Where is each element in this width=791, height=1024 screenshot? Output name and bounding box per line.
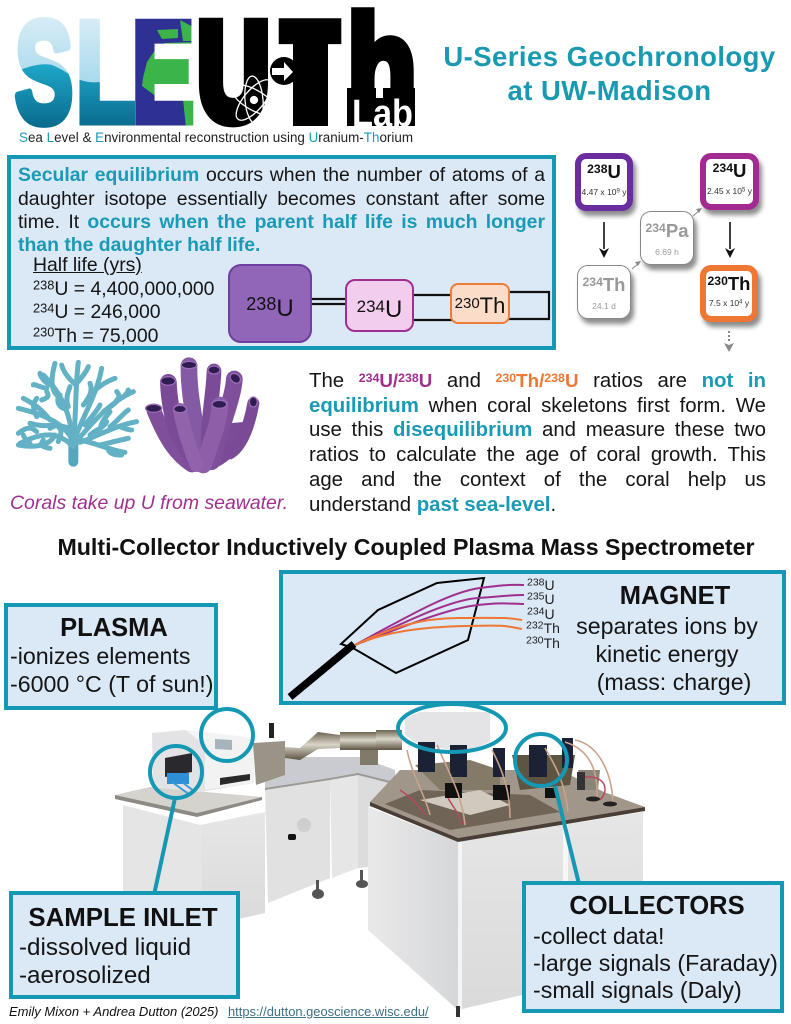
isotope: 230Th: 230Th [708, 273, 750, 294]
text: plasma description: -6000 °C (T of sun!) [10, 670, 213, 696]
logo: SLEUTh Lab [14, 0, 417, 150]
node: 234U: 234U [357, 296, 402, 323]
logo: SLEUTh Lab: Lab [352, 93, 413, 135]
text: secular equilibrium definition: daughter isotope essentially becomes constant after some [18, 188, 545, 210]
magnet housing [405, 712, 490, 752]
label: 230Th: 230Th [526, 635, 560, 651]
isotope: 234Th: 234Th [582, 274, 625, 295]
title [443, 41, 776, 106]
node: 238U [228, 264, 312, 343]
title: at UW-Madison [508, 74, 711, 106]
node: 230Th: 230Th [455, 293, 505, 318]
text: collectors description [533, 923, 778, 1003]
text: secular equilibrium definition [18, 164, 546, 256]
heading: instrument: Multi-Collector Inductively Coupled Plasma Mass Spectrometer [57, 534, 755, 560]
isotope: 234U: 2.45 x 105 y [707, 186, 752, 196]
icon: branching blue coral [18, 362, 137, 462]
isotope: 234Pa: 234Pa [645, 220, 688, 241]
diagram: decay chain connectors [312, 290, 550, 322]
tagline: Sea Level & Environmental reconstruction using Uranium-Thorium [19, 130, 413, 145]
isotope: 230Th: 7.5 x 104 y [709, 298, 749, 308]
text: magnet description [576, 613, 758, 695]
isotope: 238U: 4.47 x 109 y [582, 187, 626, 197]
isotope: 234Th [577, 265, 631, 319]
list: half lives: Half life (yrs) [33, 254, 142, 276]
caption: corals: Corals take up U from seawater. [10, 492, 288, 514]
text: disequilibrium explanation: ratios to calculate the age of coral growth. This [309, 444, 766, 466]
node: 230Th [450, 283, 510, 324]
label: 235U: 235U [527, 591, 555, 607]
text: collectors description: -large signals (Faraday) [533, 950, 778, 976]
plasma source unit [152, 730, 254, 795]
arrows [599, 208, 735, 352]
text: secular equilibrium definition: time. It occurs when the parent half life is much longer [18, 211, 545, 233]
icon: corals [16, 357, 260, 474]
label: 238U: 238U [527, 577, 555, 593]
callout circles and leaders [150, 704, 579, 895]
text: disequilibrium explanation: understand past sea-level. [309, 494, 556, 516]
text: disequilibrium explanation: equilibrium when coral skeletons first form. We [309, 395, 766, 417]
text: disequilibrium explanation [309, 370, 766, 516]
text: plasma description [10, 643, 213, 697]
text: collectors description: -small signals (Daly) [533, 977, 742, 1003]
text: secular equilibrium definition: than the daughter half life. [18, 234, 260, 256]
text: magnet description: kinetic energy [595, 641, 739, 667]
node: 234U [345, 279, 414, 332]
heading: collectors: COLLECTORS [569, 892, 745, 920]
isotope: 234Pa [640, 211, 694, 265]
icon: purple tube coral [146, 361, 257, 472]
left cabinet [115, 787, 265, 927]
diagram: U decay series [574, 153, 766, 352]
text: magnet description: separates ions by [576, 613, 758, 639]
panel: plasma [4, 603, 218, 710]
panel: secular equilibrium [7, 155, 556, 350]
text: disequilibrium explanation: age and the context of the coral help us [309, 469, 766, 491]
interface and flight tube [253, 723, 402, 785]
text: plasma description: -ionizes elements [10, 643, 190, 669]
title: U-Series Geochronology [443, 41, 776, 72]
label: 234U: 234U [527, 606, 555, 622]
isotope: 234U [700, 153, 759, 210]
heading: magnet: MAGNET [620, 582, 730, 610]
isotope: 234Pa: 6.69 h [655, 247, 679, 257]
list: half lives: 238U = 4,400,000,000 [33, 277, 214, 300]
credits: Emily Mixon + Andrea Dutton (2025) [9, 1004, 218, 1019]
list: half lives: 230Th = 75,000 [33, 324, 158, 346]
text: sample inlet description [19, 934, 191, 989]
isotope: 238U: 238U [587, 161, 621, 182]
label: 232Th: 232Th [526, 620, 560, 636]
text: magnet description: (mass: charge) [597, 669, 751, 695]
panel: sample inlet [9, 891, 240, 999]
text: sample inlet description: -aerosolized [19, 962, 151, 989]
logo: SLEUTh Lab: U [198, 0, 269, 149]
diagram: magnet sector [288, 576, 524, 700]
list: half lives: 234U = 246,000 [33, 301, 161, 323]
middle cabinet [265, 757, 395, 903]
heading: sample inlet: SAMPLE INLET [28, 904, 218, 932]
list: half lives [33, 254, 214, 346]
right cabinet [368, 755, 645, 1017]
isotope: 234U: 234U [713, 160, 746, 181]
isotope: 238U [575, 153, 633, 211]
node: 238U: 238U [246, 294, 294, 322]
text: collectors description: -collect data! [533, 923, 664, 949]
isotope: 234Th: 24.1 d [592, 301, 616, 311]
icon: arrow circle [268, 57, 298, 85]
text: sample inlet description: -dissolved liquid [19, 934, 191, 961]
isotope: 230Th [700, 265, 758, 322]
text: secular equilibrium definition: Secular equilibrium occurs when the number of atoms of a [18, 164, 545, 186]
icon: atom [227, 74, 281, 126]
heading: plasma: PLASMA [60, 614, 168, 642]
text: disequilibrium explanation: The 234U/238U and 230Th/238U ratios are not in [309, 370, 766, 392]
illustration: mass spectrometer [115, 705, 645, 1017]
solenoid valves and tubing [400, 738, 617, 825]
panel: magnet [279, 570, 786, 705]
link: lab website: https://dutton.geoscience.wisc.edu/ [228, 1004, 429, 1019]
text: disequilibrium explanation: use this disequilibrium and measure these two [309, 419, 766, 441]
panel: collectors [522, 881, 784, 1013]
